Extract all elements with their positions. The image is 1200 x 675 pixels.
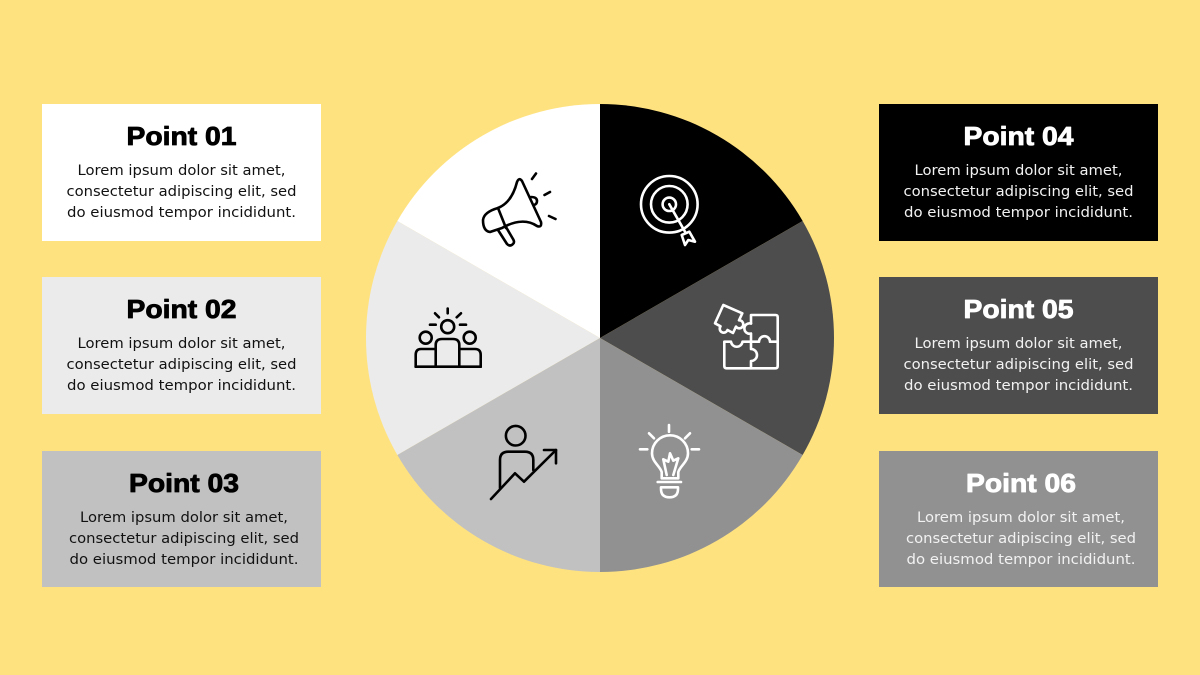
icon: people group [416,308,481,367]
text: point 05 body [904,336,1134,394]
text: point 01 body: do eiusmod tempor incididunt. [67,205,296,221]
text: point 01 body [66,163,296,221]
heading: point 06: Point 06 [966,468,1076,498]
slice: point 03 [397,338,600,572]
text: point 02 body: Lorem ipsum dolor sit amet, [78,336,286,352]
heading: point 02: Point 02 [126,294,236,324]
text: point 03 body: consectetur adipiscing elit, sed [69,531,299,547]
icon: megaphone [483,174,556,246]
panel: point 05 [879,277,1158,414]
text: point 03 body [69,510,299,568]
panel: point 06 [879,451,1158,587]
text: point 06 body: Lorem ipsum dolor sit amet, [917,510,1125,526]
icon: target with arrow [641,176,698,245]
panel: point 04 [879,104,1158,241]
pie chart [366,104,834,572]
text: point 06 body: consectetur adipiscing elit, sed [906,531,1136,547]
text: point 06 body [906,510,1136,568]
text: point 05 body: do eiusmod tempor incididunt. [904,378,1133,394]
text: point 06 body: do eiusmod tempor incididunt. [906,552,1136,568]
slice: point 06 [600,338,803,572]
text: point 04 body: consectetur adipiscing elit, sed [904,184,1134,200]
text: point 04 body [904,163,1134,221]
text: point 02 body: do eiusmod tempor incididunt. [67,378,296,394]
text: point 02 body: consectetur adipiscing elit, sed [66,357,296,373]
icon: puzzle pieces [715,305,778,368]
text: point 05 body: Lorem ipsum dolor sit amet, [914,336,1122,352]
text: point 04 body: do eiusmod tempor incididunt. [904,205,1133,221]
panel: point 03 [42,451,321,587]
slice: point 01 [397,104,600,338]
heading: point 05: Point 05 [964,294,1074,324]
heading: point 01: Point 01 [126,121,236,151]
panel: point 01 [42,104,321,241]
slice: point 04 [600,104,803,338]
heading: point 04: Point 04 [964,121,1074,151]
text: point 03 body: Lorem ipsum dolor sit amet, [80,510,288,526]
text: point 04 body: Lorem ipsum dolor sit amet, [914,163,1122,179]
panel: point 02 [42,277,321,414]
heading: point 03: Point 03 [129,468,239,498]
text: point 01 body: Lorem ipsum dolor sit amet, [78,163,286,179]
icon: light bulb [640,425,699,497]
text: point 02 body [66,336,296,394]
text: point 03 body: do eiusmod tempor incididunt. [70,552,298,568]
icon: person with growth arrow [491,426,556,499]
text: point 01 body: consectetur adipiscing elit, sed [66,184,296,200]
slice: point 02 [366,221,600,455]
text: point 05 body: consectetur adipiscing elit, sed [904,357,1134,373]
slice: point 05 [600,221,834,455]
